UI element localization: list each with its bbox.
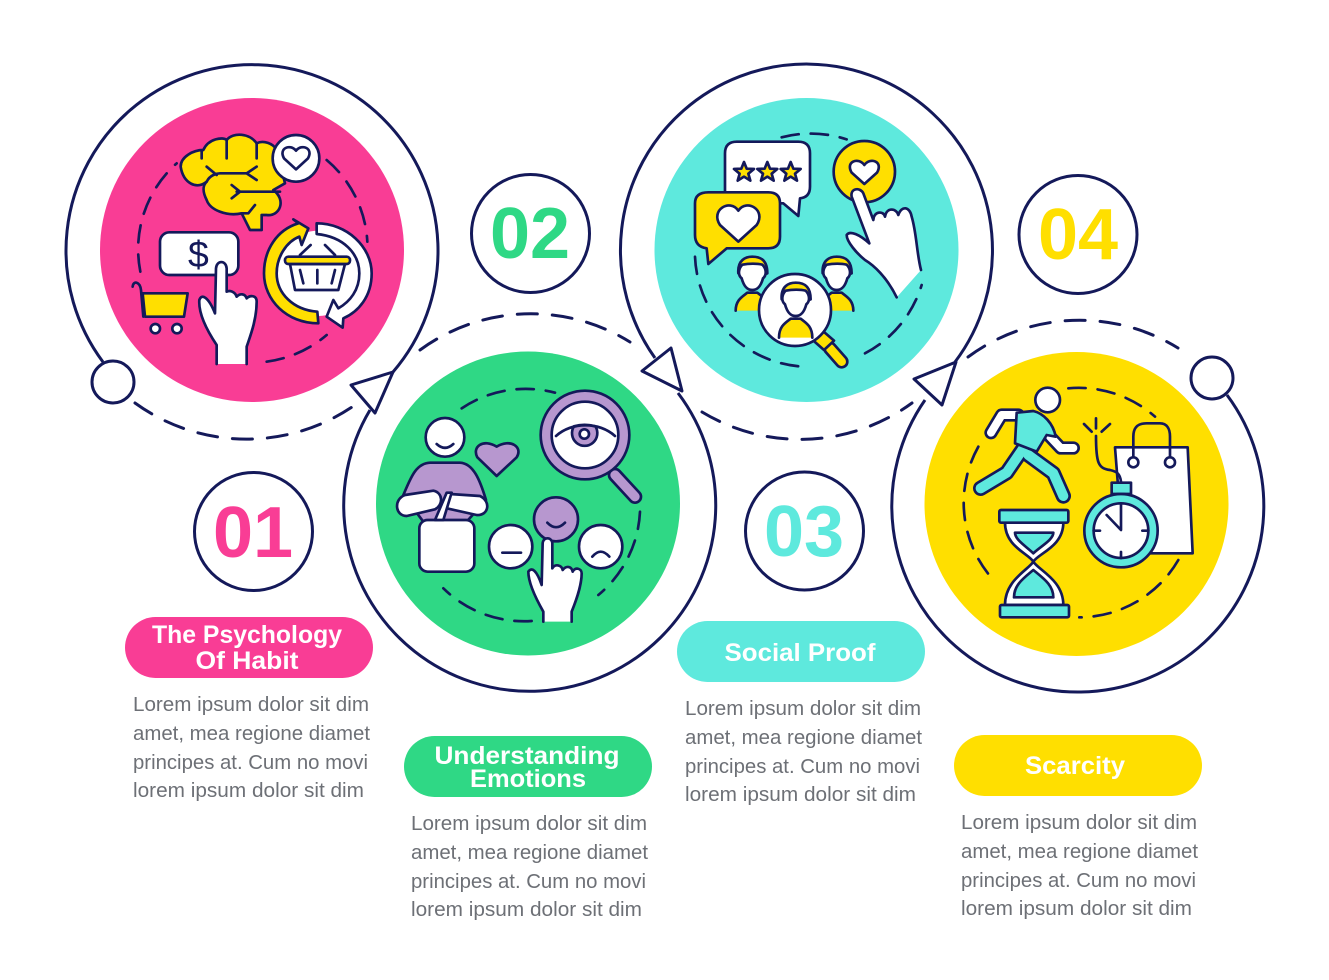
dashed ring inside circle 2 — [443, 389, 640, 621]
number badge 04 — [1019, 176, 1137, 294]
heading pill 2 — [404, 736, 652, 797]
end node — [1191, 357, 1233, 399]
icon: magnifier with eye — [541, 391, 635, 497]
text block 3 — [685, 697, 922, 806]
heading pill 2: Emotions — [470, 765, 586, 793]
icon: pointing hand — [847, 189, 921, 297]
icon: heart badge — [273, 135, 319, 182]
ring 1 — [66, 65, 438, 372]
text block 3: lorem ipsum dolor sit dim — [685, 783, 916, 806]
icon: basket with cycle arrows — [264, 219, 372, 328]
ring 4 — [892, 395, 1264, 692]
number badge 04: 04 — [1038, 195, 1118, 275]
text block 3: principes at. Cum no movi — [685, 755, 920, 778]
icon: right person — [820, 257, 853, 311]
icon: pointing hand — [528, 538, 582, 622]
icon group: social proof — [695, 134, 922, 367]
text block 4: principes at. Cum no movi — [961, 869, 1196, 892]
text block 3: Lorem ipsum dolor sit dim — [685, 697, 921, 720]
icon group: habit — [133, 135, 372, 364]
icon: review bubble with stars — [725, 142, 810, 216]
dashed ring inside circle 1 — [138, 160, 367, 362]
arrow into step 4 — [914, 362, 956, 405]
panel: circle 1 pink — [100, 98, 404, 402]
heading pill 2: Understanding — [434, 742, 620, 770]
panel: circle 3 teal — [654, 98, 958, 402]
heading pill 4 — [954, 735, 1202, 796]
heading pill 4: Scarcity — [1025, 752, 1125, 780]
icon group: scarcity — [964, 388, 1193, 617]
icon: shopping cart — [133, 283, 188, 333]
text block 1 — [133, 693, 370, 802]
icon: stopwatch bomb — [1084, 418, 1158, 567]
icon: heart — [476, 443, 518, 476]
heading pill 3 — [677, 621, 925, 682]
number badge 03 — [746, 472, 864, 590]
panel: circle 2 green — [376, 352, 680, 656]
icon group: emotions — [397, 389, 640, 622]
icon: hourglass — [999, 510, 1069, 617]
icon: brain — [181, 135, 285, 230]
number badge 01 — [194, 472, 312, 590]
ring 3 — [620, 64, 992, 362]
heading pill 3: Social Proof — [724, 639, 876, 667]
text block 2: amet, mea regione diamet — [411, 841, 648, 864]
arrow into step 2 — [351, 372, 393, 413]
icon: rating faces — [489, 497, 622, 568]
icon: price button: $ — [188, 233, 209, 275]
text block 1: principes at. Cum no movi — [133, 751, 368, 774]
number badge 03: 03 — [764, 492, 844, 572]
connector rings and dashed arcs — [66, 64, 1264, 692]
text block 3: amet, mea regione diamet — [685, 726, 922, 749]
dashed arc above circle 2 — [420, 314, 630, 350]
panel: circle 4 yellow — [924, 352, 1228, 656]
text block 1: lorem ipsum dolor sit dim — [133, 779, 364, 802]
text block 2: principes at. Cum no movi — [411, 870, 646, 893]
number badge 02: 02 — [490, 194, 570, 274]
text block 4: lorem ipsum dolor sit dim — [961, 897, 1192, 920]
dashed ring inside circle 3 — [695, 134, 922, 367]
icon: running person — [981, 388, 1073, 496]
ring 2 — [344, 393, 716, 691]
icon: price button — [160, 232, 238, 275]
text block 2: lorem ipsum dolor sit dim — [411, 898, 642, 921]
text block 4: Lorem ipsum dolor sit dim — [961, 811, 1197, 834]
icon: shopping bag — [1115, 423, 1193, 553]
icon: pointing hand — [199, 262, 257, 364]
icon: left person — [736, 257, 769, 311]
text block 2: Lorem ipsum dolor sit dim — [411, 812, 647, 835]
text block 1: amet, mea regione diamet — [133, 722, 370, 745]
text block 4 — [961, 811, 1198, 920]
icon: heart bubble — [695, 192, 780, 264]
dashed arc below circle 1 — [135, 403, 355, 439]
dashed arc below circle 3 — [702, 403, 912, 439]
dashed arc above circle 4 — [968, 320, 1178, 357]
text block 4: amet, mea regione diamet — [961, 840, 1198, 863]
heading pill 1: The Psychology — [152, 621, 342, 649]
heading pill 1: Of Habit — [196, 647, 299, 675]
number badge 02 — [472, 174, 590, 292]
text block 1: Lorem ipsum dolor sit dim — [133, 693, 369, 716]
heading pill 1 — [125, 617, 373, 678]
text block 2 — [411, 812, 648, 921]
icon: magnifier with person — [759, 274, 842, 362]
arrow into step 3 — [642, 348, 682, 391]
dashed ring inside circle 4 — [964, 388, 1178, 617]
number badge 01: 01 — [213, 493, 293, 573]
icon: like button — [834, 141, 895, 202]
start node — [92, 361, 134, 403]
icon: person with bag — [397, 418, 487, 572]
